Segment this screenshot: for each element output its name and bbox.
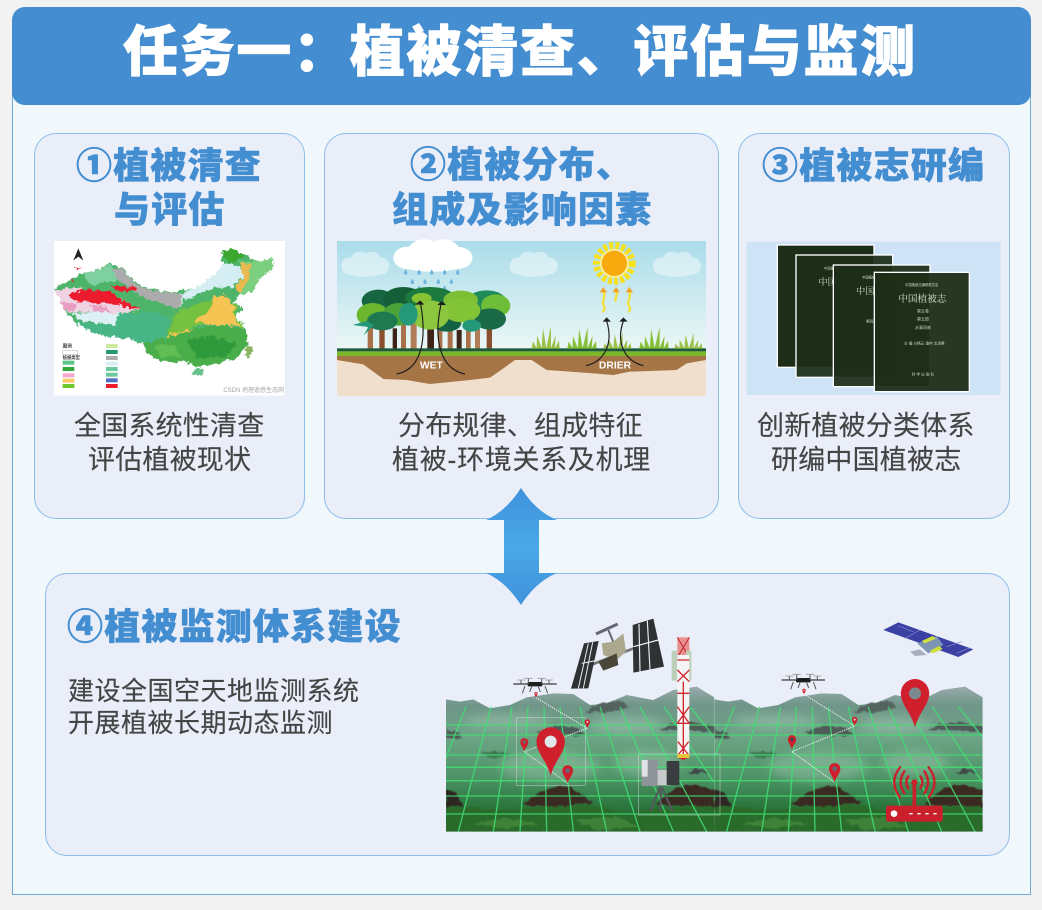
grass [532,326,702,349]
illustration: space-air-ground monitoring network [446,618,983,832]
book 3 [833,265,930,387]
heading line 1: ①植被清查 [76,145,262,186]
book 1: 中国 [818,276,837,288]
rain cloud [393,239,472,272]
watermark: CSDN 地理遥感生态网 [223,386,284,394]
fascicle: 第五册 [917,316,929,322]
type: 水青冈林 [915,324,931,330]
heading: ③植被志研编 [762,145,985,186]
icon: satellite [883,622,973,657]
heading line 2: 组成及影响因素 [392,189,652,230]
publisher: 科 学 出 版 社 [912,372,935,377]
icon: space station [571,619,664,689]
description line 1: 分布规律、组成特征 [398,411,643,441]
description line 2: 植被-环境关系及机理 [392,445,651,475]
illustration: wet and drier ecosystems [337,239,706,396]
book 2: 中国 [818,276,837,288]
map: China vegetation map [54,241,285,396]
heading line 1: ②植被分布、 [410,144,633,185]
heading: ④植被监测体系建设 [67,606,402,647]
title: 任务一：植被清查、评估与监测 [123,21,917,83]
book 4 [874,272,969,392]
description line 1: 创新植被分类体系 [757,411,975,441]
description line 1: 建设全国空天地监测系统 [68,676,360,706]
panel: flora compilation [738,133,1010,519]
icon: drone left [513,678,557,693]
book 2: 中国植被 [824,265,838,270]
tree trunks [368,318,492,349]
panel: monitoring [45,573,1010,856]
editors: 主 编 方精云 潘存 沈泽昊 [904,341,945,346]
dotted links [524,694,855,783]
illustration: flora volumes [746,242,1001,395]
map legend title: 图例 [63,342,72,349]
heading line 2: 与评估 [114,189,226,230]
description line 2: 评估植被现状 [88,445,251,475]
pale clouds [341,252,701,277]
book 3: 第四卷 [866,318,877,323]
icon: communications tower [672,637,691,760]
volume: 第五卷 [917,307,929,313]
book 3: 中国植被 [862,275,876,280]
map legend swatches [63,344,118,388]
panel: vegetation survey [34,133,305,519]
description line 1: 全国系统性清查 [74,411,264,441]
icon: laser scanner [642,760,679,812]
tree canopy [353,287,510,336]
rain [404,269,459,291]
arrow: two-way link [486,488,557,605]
label: wet: WET [420,361,443,372]
book title: 中国植被志 [898,293,947,305]
terrain left [373,687,840,832]
description line 2: 研编中国植被志 [771,445,961,475]
book 3: 中国 [856,285,875,297]
sun [598,247,631,280]
description line 2: 开展植被长期动态监测 [68,708,333,738]
terrain right [642,687,1042,832]
map legend subtitle: 植被类型 [63,354,81,361]
title banner [12,7,1031,105]
heat waves [600,287,633,312]
panel: distribution [324,133,719,519]
icon: wireless router [886,767,943,822]
label: drier: DRIER [599,361,632,372]
book 2 [796,255,893,377]
ground [337,348,706,396]
series name: 中国植被志编辑委员会 [905,282,939,287]
book 1 [777,245,874,367]
icon: location pins left [520,692,590,783]
icon: location pins right [788,679,929,782]
north arrow [73,248,83,261]
evaporation arrows [397,300,643,374]
survey frames [517,717,720,815]
icon: drone right [782,674,825,689]
